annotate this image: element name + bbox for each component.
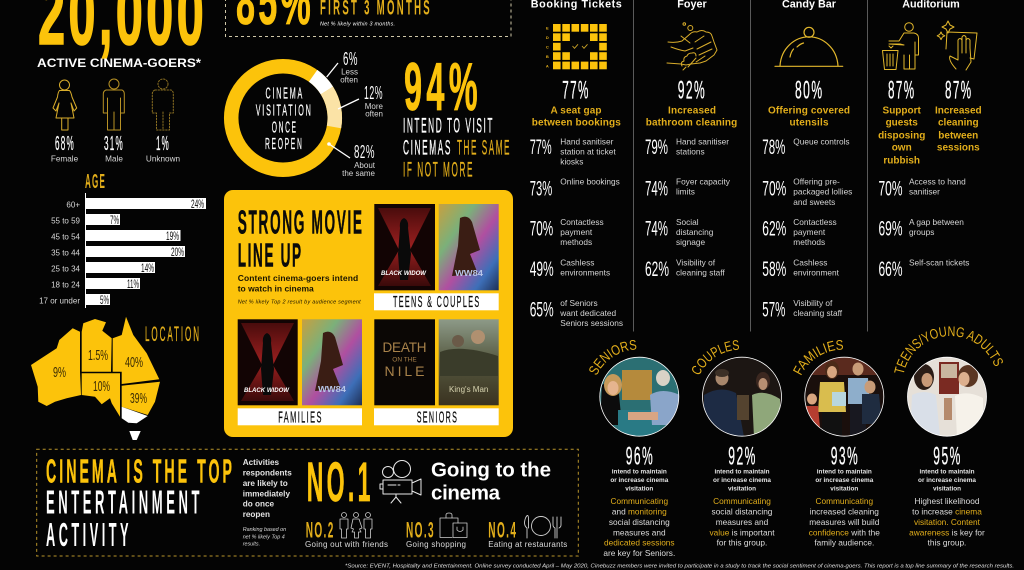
panel: teens and young adults — [894, 326, 1003, 548]
chart: age bars: 14% — [141, 261, 154, 275]
rank 4: Eating at restaurants — [488, 540, 567, 549]
stat: more often — [364, 83, 384, 119]
stat: more often: often — [365, 110, 383, 119]
rank 3: Going shopping — [406, 540, 466, 549]
list — [645, 136, 731, 281]
list: 74% — [645, 218, 668, 241]
insight: to increase cinema — [912, 506, 982, 516]
stat: about the same: the same — [342, 169, 376, 178]
list: distancing — [676, 227, 714, 237]
finding: cleaning: between — [938, 130, 978, 141]
insight: for this group. — [717, 538, 767, 548]
chart: age bars: 24% — [191, 197, 204, 211]
finding: rubbish: own — [892, 143, 912, 154]
insight: Communicating — [713, 496, 771, 506]
panel: foyer: 92% — [678, 77, 706, 105]
text: THE SAME — [457, 137, 511, 160]
stat: less often: often — [340, 75, 358, 84]
poster group: families: BLACK WIDOW — [244, 387, 290, 394]
chart: age bars: 19% — [166, 229, 179, 243]
stat: about the same — [342, 142, 376, 178]
list: 77% — [530, 136, 552, 159]
list: Visibility of — [676, 257, 716, 267]
insight: visitation. Content — [914, 517, 981, 527]
callout: 94% intend to visit: CINEMAS — [403, 137, 452, 160]
description: do once — [243, 500, 275, 509]
insight — [809, 496, 880, 548]
rank 4 — [488, 516, 567, 549]
insight: awareness is key for — [909, 527, 985, 537]
panel: top entertainment activity — [37, 449, 578, 556]
list: 70% — [530, 218, 553, 241]
rank 4: NO.4 — [488, 517, 517, 542]
main stats — [888, 77, 972, 105]
list: 70% — [762, 178, 786, 201]
poster group: families — [238, 319, 362, 427]
ranking note: Ranking based on — [243, 527, 286, 533]
panel: strong movie line up — [224, 190, 513, 437]
sublabel: intend to maintain — [919, 469, 975, 476]
map: location: 9% — [53, 364, 66, 381]
rank 1: Going to the — [431, 459, 551, 482]
list: Foyer capacity — [676, 176, 731, 186]
ranking note — [243, 527, 286, 548]
curved label: COUPLES — [692, 340, 739, 374]
panel: families: 93% — [831, 442, 859, 470]
sublabel — [918, 469, 976, 492]
list: Queue controls — [793, 136, 850, 146]
poster group: teens and couples: TEENS & COUPLES — [393, 294, 480, 311]
description: are likely to — [243, 479, 288, 488]
stat: less often: 6% — [343, 49, 358, 69]
sublabel: intend to maintain — [817, 469, 872, 476]
panel: foyer — [645, 0, 737, 281]
insight: measures and — [613, 527, 666, 537]
poster group: seniors: SENIORS — [417, 410, 458, 427]
list: Self-scan tickets — [909, 257, 969, 267]
donut centre label: REOPEN — [265, 136, 304, 153]
icon: covered dish — [775, 27, 843, 66]
insight: social distancing — [609, 517, 670, 527]
description: respondents — [243, 469, 292, 478]
icon: film camera — [380, 460, 421, 503]
stat: male: Male — [105, 154, 123, 164]
finding: rubbish: disposing — [878, 130, 925, 141]
stat: less often — [340, 49, 358, 84]
stat: unknown: Unknown — [146, 154, 181, 164]
list: 70% — [878, 178, 902, 201]
list: 57% — [762, 299, 785, 322]
photo: families — [804, 357, 885, 437]
finding — [532, 105, 621, 129]
column dividers — [634, 0, 868, 332]
panel: booking tickets — [530, 0, 623, 328]
poster group: seniors: DEATH — [382, 340, 426, 355]
chart: age bars: 55 to 59 — [51, 216, 81, 226]
map: location: 1.5% — [88, 347, 108, 364]
map: location: 40% — [125, 354, 143, 371]
sublabel: or increase cinema — [610, 477, 669, 484]
list: Cashless — [793, 257, 827, 267]
insight: measures will build — [809, 517, 880, 527]
curved label: FAMILIES — [793, 340, 843, 376]
description: immediately — [243, 489, 290, 498]
finding — [646, 105, 737, 129]
map: location: 39% — [130, 390, 147, 407]
rank 2: Going out with friends — [305, 540, 388, 549]
insight: social distancing — [712, 506, 773, 516]
list: methods — [793, 237, 825, 247]
list: kiosks — [560, 157, 583, 167]
panel: gender split: 31% — [104, 133, 124, 155]
callout: 94% intend to visit: 94% — [404, 49, 482, 125]
stat: about the same: 82% — [354, 142, 375, 162]
photo: seniors — [599, 357, 680, 437]
description: reopen — [243, 510, 270, 519]
main stats: 87% — [888, 77, 916, 105]
panel: teens and young adults: 95% — [933, 442, 962, 470]
list: signage — [676, 237, 705, 247]
icon: unknown gender — [152, 79, 173, 130]
panel description: Net % likely Top 2 result by audience segment — [238, 300, 361, 306]
panel: top entertainment activity: CINEMA IS THE TOP — [46, 453, 235, 490]
map: location — [31, 317, 201, 440]
chart: age bars: AGE — [85, 171, 106, 193]
callout: 94% intend to visit: IF NOT MORE — [403, 159, 474, 182]
poster group: seniors: NILE — [384, 363, 424, 379]
finding: rubbish: rubbish — [883, 155, 920, 166]
list: payment — [560, 227, 593, 237]
heading: strong movie line up — [238, 203, 364, 274]
list — [762, 136, 852, 322]
callout: 94% intend to visit — [403, 49, 511, 182]
sublabel — [713, 469, 771, 492]
list: packaged lollies — [793, 187, 852, 197]
rank 1: cinema — [431, 481, 501, 504]
list: 74% — [645, 178, 668, 201]
stat: less often: Less — [341, 68, 358, 76]
list: Hand sanitiser — [676, 136, 729, 146]
description: Activities — [243, 458, 280, 467]
list: environments — [560, 268, 610, 278]
insight: this group. — [928, 538, 966, 548]
insight: Communicating — [610, 496, 668, 506]
sublabel: visitation — [933, 485, 961, 492]
curved label: TEENS/YOUNG ADULTS — [894, 326, 1003, 373]
list: want dedicated — [559, 308, 616, 318]
icon: seat map: A — [546, 64, 549, 68]
icon: cleaning wipe — [937, 21, 977, 70]
insight: increased cleaning — [810, 506, 879, 516]
icon: seat map: D — [546, 35, 549, 40]
list: station at ticket — [560, 146, 616, 156]
insight: are key for Seniors. — [603, 548, 675, 558]
poster group: seniors — [374, 319, 499, 427]
finding: cleaning: Increased — [935, 105, 982, 116]
stat: more often: 12% — [364, 83, 383, 103]
list: 58% — [762, 258, 786, 281]
chart: age bars: 60+ — [66, 200, 80, 210]
list: Contactless — [793, 217, 837, 227]
list: cleaning staff — [793, 308, 843, 318]
list: Seniors sessions — [560, 318, 623, 328]
donut centre label: CINEMA — [266, 86, 304, 102]
list: sanitiser — [909, 187, 940, 197]
finding: Increased — [668, 105, 716, 116]
panel: couples — [692, 340, 782, 548]
headline caption: ACTIVE CINEMA-GOERS* — [37, 56, 201, 70]
finding: cleaning: cleaning — [938, 118, 979, 129]
stat: unknown — [146, 133, 181, 164]
sublabel: visitation — [625, 485, 653, 492]
footnote: *Source: EVENT, Hospitality and Entertainment. Online survey conducted April – May 2020, Cinebuzz members were invited to participate in a study to track the social sentiment of cinema-goers. This report is a top line summary of the research results. — [345, 564, 1014, 570]
curved label: SENIORS — [589, 340, 636, 375]
poster group: teens and couples — [374, 204, 499, 311]
finding: Offering covered — [768, 105, 850, 116]
stat: female: Female — [51, 154, 79, 164]
rank 3 — [406, 513, 467, 549]
panel: gender split: 68% — [55, 133, 75, 155]
list: of Seniors — [560, 298, 598, 308]
rank 1 — [307, 450, 551, 513]
icon: female — [53, 80, 77, 130]
icon: disposing rubbish — [882, 23, 918, 70]
sublabel: or increase cinema — [713, 477, 771, 484]
photo: teens — [907, 357, 988, 437]
panel: candy bar: 80% — [795, 77, 824, 105]
heading — [46, 453, 235, 553]
ranking note: results. — [243, 542, 260, 548]
panel: respondents headline — [37, 0, 207, 70]
insight: measures and — [716, 517, 769, 527]
list: 69% — [878, 218, 902, 241]
finding: rubbish: guests — [886, 118, 918, 129]
finding — [768, 105, 850, 129]
list: 65% — [530, 299, 554, 322]
insight: family audience. — [814, 538, 874, 548]
chart: age bars: 20% — [171, 245, 184, 259]
finding: between bookings — [532, 118, 621, 129]
finding: utensils — [790, 118, 829, 129]
insight: and monitoring — [612, 506, 667, 516]
icon: male — [103, 79, 124, 130]
sublabel: or increase cinema — [918, 477, 976, 484]
insight: Communicating — [815, 496, 873, 506]
chart: age bars: 18 to 24 — [51, 280, 81, 290]
panel: strong movie line up: STRONG MOVIE — [238, 203, 364, 240]
list: Contactless — [560, 217, 604, 227]
finding: bathroom cleaning — [646, 118, 737, 129]
list: 73% — [530, 178, 552, 201]
sublabel: visitation — [830, 485, 858, 492]
insight: dedicated sessions — [604, 538, 675, 548]
icon: washing hands — [667, 23, 717, 70]
sublabel: visitation — [728, 485, 756, 492]
list: Visibility of — [793, 298, 833, 308]
panel description — [238, 273, 361, 306]
callout: first 3 months — [226, 0, 511, 38]
finding: rubbish: Support — [883, 105, 922, 116]
list: cleaning staff — [676, 268, 725, 278]
sublabel — [815, 469, 874, 492]
note: Net % likely within 3 months. — [320, 22, 395, 28]
list: 62% — [645, 258, 669, 281]
ranking note: net % likely Top 4 — [243, 534, 285, 540]
list — [878, 176, 969, 281]
panel: top entertainment activity: ENTERTAINMENT — [46, 483, 203, 520]
stat: female — [51, 133, 79, 164]
stat: unknown: 1% — [156, 133, 170, 155]
insight — [709, 496, 775, 548]
stat: more often: More — [365, 102, 384, 111]
list: A gap between — [909, 217, 964, 227]
list: 79% — [645, 136, 668, 159]
list: 49% — [530, 258, 554, 281]
poster group: teens and couples: BLACK WIDOW — [381, 270, 427, 277]
chart: visitation donut: VISITATION — [256, 102, 313, 120]
panel: seniors — [589, 340, 680, 558]
list: stations — [676, 146, 705, 156]
description — [243, 458, 292, 519]
poster group: families: FAMILIES — [278, 410, 323, 427]
sublabel: intend to maintain — [612, 469, 667, 476]
list: groups — [909, 227, 934, 237]
chart: age bars: 7% — [110, 213, 119, 227]
icon: seat map — [546, 24, 607, 69]
list: Hand sanitiser — [560, 136, 614, 146]
rank 1: NO.1 — [307, 450, 374, 513]
poster group: families: WW84 — [318, 385, 347, 394]
insight: confidence with the — [809, 527, 880, 537]
panel: auditorium: 87% — [945, 77, 972, 105]
chart: age bars: 35 to 44 — [51, 248, 81, 258]
list: limits — [676, 187, 695, 197]
panel description: Content cinema-goers intend — [238, 273, 358, 283]
sublabel — [610, 469, 669, 492]
list: and sweets — [793, 197, 835, 207]
list: Access to hand — [909, 176, 966, 186]
chart: age bars: 11% — [127, 277, 139, 291]
map: location: 10% — [93, 378, 110, 395]
chart: age bars: 45 to 54 — [51, 232, 81, 242]
list: Social — [676, 217, 699, 227]
icon: shopping bags — [440, 513, 467, 538]
list: environment — [793, 268, 840, 278]
list — [530, 136, 623, 328]
list: Cashless — [560, 257, 594, 267]
panel: gender split — [51, 79, 181, 164]
poster group: seniors: ON THE — [392, 356, 417, 364]
chart: age bars: 17 or under — [39, 296, 80, 306]
heading: ACTIVITY — [46, 516, 132, 553]
sublabel: or increase cinema — [815, 477, 874, 484]
rank 2: NO.2 — [306, 517, 335, 542]
photo: couples — [702, 357, 783, 437]
list: 62% — [762, 218, 786, 241]
chart: age bars: 25 to 34 — [51, 264, 81, 274]
list: Offering pre- — [793, 176, 840, 186]
rank 2 — [305, 512, 388, 549]
chart: age bars — [39, 171, 206, 308]
stat: about the same: About — [354, 161, 376, 170]
rank 3: NO.3 — [406, 517, 435, 542]
finding: A seat gap — [550, 105, 602, 116]
panel: candy bar — [762, 0, 852, 322]
icon: seat map: B — [546, 54, 549, 59]
panel: booking tickets: 77% — [562, 77, 590, 105]
icon: friends — [340, 512, 372, 538]
poster group: teens and couples: WW84 — [455, 269, 484, 278]
donut centre label — [256, 86, 313, 153]
icon: cutlery — [525, 516, 561, 538]
donut centre label: ONCE — [272, 120, 298, 136]
panel: seniors: 96% — [626, 442, 654, 470]
poster group: seniors: King's Man — [449, 385, 488, 394]
panel: families — [793, 340, 884, 548]
icon: seat map: E — [546, 26, 549, 30]
list: 66% — [878, 258, 902, 281]
panel: couples: 92% — [728, 442, 757, 470]
heading: strong movie line up: LINE UP — [238, 237, 303, 274]
stat: male — [104, 133, 124, 164]
icon: seat map: C — [546, 44, 549, 50]
finding: cleaning — [935, 105, 982, 154]
insight — [603, 496, 675, 558]
list: methods — [560, 237, 592, 247]
list: payment — [793, 227, 826, 237]
finding: cleaning: sessions — [937, 143, 980, 154]
finding: rubbish — [878, 105, 925, 166]
sublabel: intend to maintain — [714, 469, 770, 476]
panel description: to watch in cinema — [238, 283, 314, 293]
insight: value is important — [709, 527, 775, 537]
panel: auditorium — [878, 0, 982, 281]
insight — [909, 496, 985, 548]
chart: age bars: 5% — [100, 293, 109, 307]
text: INTEND TO VISIT — [403, 115, 494, 138]
insight: Highest likelihood — [914, 496, 980, 506]
list: 78% — [762, 136, 785, 159]
text: LOCATION — [145, 323, 201, 346]
list: Online bookings — [560, 176, 620, 186]
chart: visitation donut — [231, 49, 384, 178]
